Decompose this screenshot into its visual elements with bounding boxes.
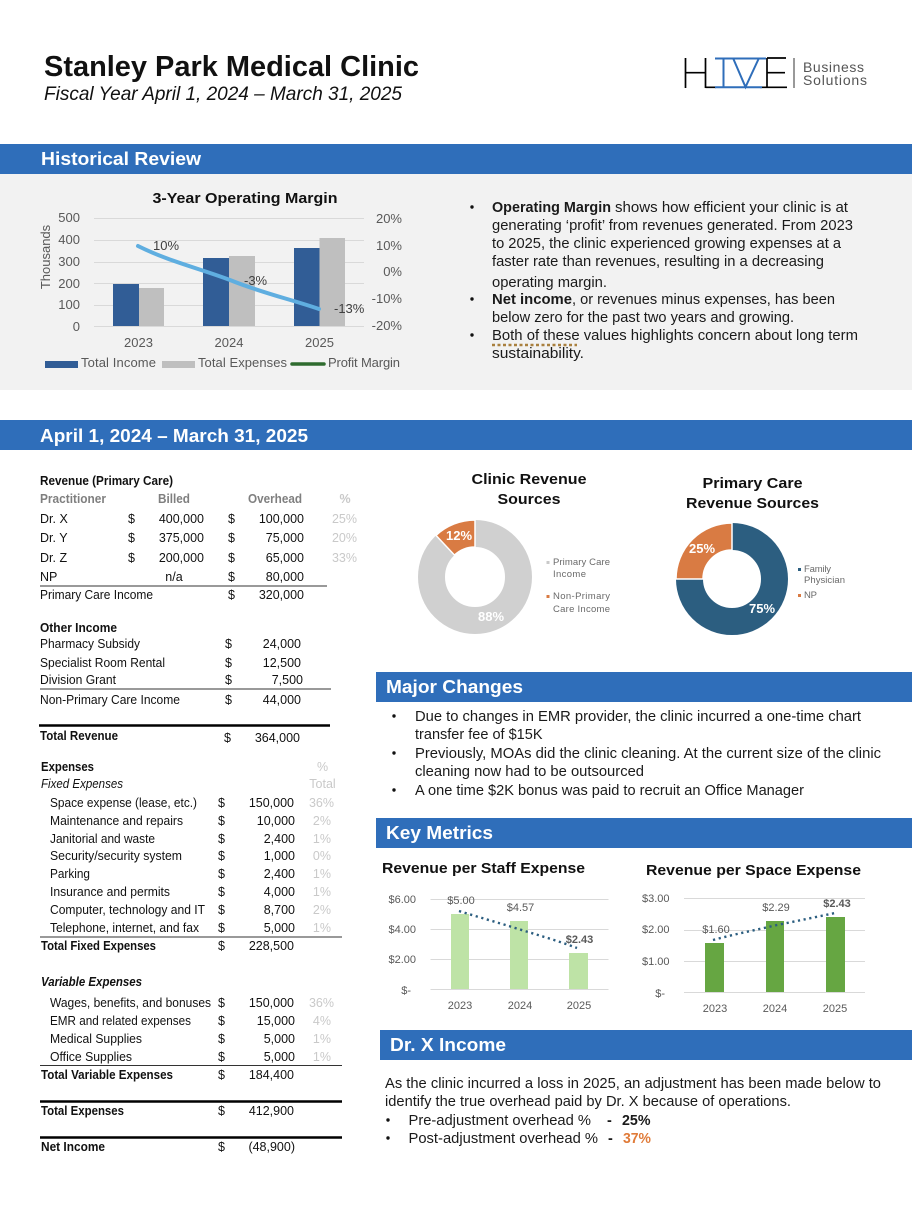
text block: major changes: Due to changes in EMR provider, the clinic incurred a one-time chart	[415, 709, 861, 725]
table: revenue: 25%	[332, 512, 357, 526]
table: expenses: 10,000	[257, 814, 295, 828]
chart: revenue per space expense: 2024	[763, 1003, 787, 1015]
text block: Dr. X income: Post-adjustment overhead %	[408, 1131, 598, 1147]
chart: revenue per staff expense: $6.00	[388, 894, 416, 906]
chart: revenue per space expense: Revenue per Space Expense	[646, 863, 861, 879]
text block: Dr. X income: As the clinic incurred a loss in 2025, an adjustment has been made below to	[385, 1076, 881, 1092]
table: revenue: n/a	[165, 570, 183, 584]
table: revenue: $	[228, 531, 235, 545]
table: expenses: 2%	[313, 814, 331, 828]
title: Stanley Park Medical Clinic	[44, 51, 419, 83]
text block: historical review notes: faster rate than revenues, resulting in a decreasing	[492, 254, 824, 270]
table: revenue: 400,000	[159, 512, 204, 526]
chart: 3-year operating margin: Profit Margin	[328, 355, 400, 370]
table: revenue: Billed	[158, 492, 190, 506]
table: revenue: 75,000	[266, 531, 304, 545]
heading bar: Historical Review: Historical Review	[41, 149, 202, 169]
table: expenses: $	[218, 1068, 225, 1082]
table: revenue: $	[225, 693, 232, 707]
chart: 3-year operating margin: 400	[58, 232, 80, 247]
table: expenses: Total	[309, 777, 336, 791]
chart: revenue per staff expense: Revenue per Staff Expense	[382, 861, 585, 877]
table: expenses: Telephone, internet, and fax	[50, 921, 200, 935]
text block: Dr. X income: Pre-adjustment overhead %	[408, 1113, 591, 1129]
table: revenue: $	[225, 637, 232, 651]
text block: historical review notes: Net income	[492, 292, 572, 308]
text block: major changes: Previously, MOAs did the clinic cleaning. At the current size of the clinic	[415, 746, 881, 762]
table: expenses: 4%	[313, 1014, 331, 1028]
chart: 3-year operating margin: Total Income	[81, 355, 156, 370]
logo: HIVE Business Solutions: Solutions	[803, 72, 867, 88]
text block: historical review notes	[470, 200, 858, 362]
chart: revenue per space expense: 2023	[703, 1003, 727, 1015]
table: expenses: $	[218, 996, 225, 1010]
table: expenses: $	[218, 939, 225, 953]
text block: major changes: A one time $2K bonus was paid to recruit an Office Manager	[415, 783, 804, 799]
table: expenses: 15,000	[257, 1014, 295, 1028]
table: revenue: $	[128, 531, 135, 545]
chart: revenue per space expense: $2.00	[642, 924, 670, 936]
chart: revenue per space expense: $2.43	[823, 898, 851, 910]
chart: primary care revenue sources donut: 25%	[689, 541, 715, 556]
chart: revenue per staff expense: 2025	[567, 1000, 591, 1012]
chart: clinic revenue sources donut	[432, 472, 610, 624]
table: expenses: 8,700	[264, 903, 295, 917]
table: expenses: 36%	[309, 996, 334, 1010]
table: expenses: $	[218, 849, 225, 863]
table: revenue: Specialist Room Rental	[40, 656, 165, 670]
table: revenue: 320,000	[259, 588, 304, 602]
chart: revenue per staff expense: 2024	[508, 1000, 532, 1012]
table: expenses: Variable Expenses	[41, 975, 142, 989]
table: revenue: $	[224, 731, 231, 745]
table: expenses: 150,000	[249, 996, 294, 1010]
chart: 3-year operating margin: 0	[73, 319, 80, 334]
text block: Dr. X income: -	[607, 1113, 612, 1129]
chart: 3-year operating margin: -3%	[244, 273, 268, 288]
table: revenue: Practitioner	[40, 492, 106, 506]
chart: revenue per space expense: $1.60	[702, 924, 730, 936]
table: revenue: Dr. Z	[40, 551, 67, 565]
chart: 3-year operating margin: Thousands	[38, 224, 53, 289]
table: revenue: 44,000	[263, 693, 301, 707]
chart: 3-year operating margin	[38, 191, 402, 370]
table: expenses: 1,000	[264, 849, 295, 863]
table: revenue: 80,000	[266, 570, 304, 584]
table: expenses: Expenses	[41, 760, 94, 774]
table: revenue: Non-Primary Care Income	[40, 693, 180, 707]
table: expenses: 2,400	[264, 867, 295, 881]
table: expenses: EMR and related expenses	[50, 1014, 191, 1028]
table: expenses: 1%	[313, 867, 331, 881]
chart: clinic revenue sources donut: Clinic Revenue	[472, 472, 586, 488]
text block: major changes: transfer fee of $15K	[415, 727, 543, 743]
table: revenue: $	[225, 656, 232, 670]
text block: Dr. X income	[385, 1076, 881, 1147]
table: revenue	[39, 474, 357, 745]
chart: 3-year operating margin: -10%	[372, 291, 402, 306]
table: expenses: Wages, benefits, and bonuses	[50, 996, 211, 1010]
chart: revenue per staff expense: 2023	[448, 1000, 472, 1012]
chart: revenue per space expense: $-	[655, 988, 665, 1000]
text block: historical review notes: to 2025, the clinic experienced growing expenses at a	[492, 236, 842, 252]
chart: revenue per staff expense: $5.00	[447, 895, 475, 907]
chart: revenue per space expense: $1.00	[642, 956, 670, 968]
table: expenses	[40, 760, 342, 1154]
table: revenue: 65,000	[266, 551, 304, 565]
table: expenses: $	[218, 832, 225, 846]
table: revenue: 20%	[332, 531, 357, 545]
table: expenses: $	[218, 921, 225, 935]
chart: primary care revenue sources donut: Physician	[804, 575, 845, 586]
chart: revenue per staff expense: $-	[401, 985, 411, 997]
chart: primary care revenue sources donut	[676, 476, 845, 622]
text block: historical review notes: shows how efficient your clinic is at	[615, 200, 848, 216]
table: expenses: $	[218, 1032, 225, 1046]
table: expenses: Total Variable Expenses	[41, 1068, 173, 1082]
heading bar: Dr. X Income: Dr. X Income	[390, 1035, 506, 1055]
text block: Dr. X income: 25%	[622, 1113, 651, 1129]
table: revenue: 200,000	[159, 551, 204, 565]
chart: 3-year operating margin: 2025	[305, 335, 334, 350]
heading bar: Dr. X Income	[380, 1030, 912, 1060]
chart: 3-year operating margin: Total Expenses	[198, 355, 288, 370]
table: expenses: Medical Supplies	[50, 1032, 142, 1046]
table: expenses: 2%	[313, 903, 331, 917]
chart: clinic revenue sources donut: Care Income	[553, 604, 610, 615]
text block: historical review notes: Both of these values highlights concern about long term	[492, 328, 858, 344]
chart: clinic revenue sources donut: Income	[553, 569, 586, 580]
table: expenses: Total Fixed Expenses	[41, 939, 156, 953]
heading bar: April 1, 2024 – March 31, 2025	[0, 420, 912, 450]
table: expenses: $	[218, 1140, 225, 1154]
table: expenses: Computer, technology and IT	[50, 903, 205, 917]
text block: Dr. X income: -	[608, 1131, 613, 1147]
chart: clinic revenue sources donut: Non-Primary	[553, 591, 610, 602]
text block: historical review notes: , or revenues minus expenses, has been	[572, 292, 835, 308]
title	[44, 51, 419, 105]
chart: 3-year operating margin: 10%	[153, 238, 179, 253]
table: revenue: 375,000	[159, 531, 204, 545]
text block: historical review notes: Operating Margin	[492, 200, 611, 216]
table: expenses: (48,900)	[248, 1140, 295, 1154]
table: revenue: $	[128, 551, 135, 565]
chart: 3-year operating margin: 10%	[376, 238, 402, 253]
text block: historical review notes: generating ‘profit’ from revenues generated. From 2023	[492, 218, 853, 234]
chart: revenue per staff expense	[382, 861, 608, 1012]
chart: revenue per staff expense: $4.00	[388, 924, 416, 936]
table: revenue: $	[228, 588, 235, 602]
text block: major changes	[392, 709, 881, 799]
chart: clinic revenue sources donut: 88%	[478, 609, 504, 624]
table: revenue: 7,500	[272, 673, 303, 687]
logo: HIVE Business Solutions	[686, 58, 867, 88]
text block: Dr. X income: identify the true overhead paid by Dr. X because of operations.	[385, 1094, 791, 1110]
table: expenses: 1%	[313, 1032, 331, 1046]
chart: revenue per space expense: 2025	[823, 1003, 847, 1015]
table: expenses: 150,000	[249, 796, 294, 810]
table: revenue: NP	[40, 570, 57, 584]
chart: 3-year operating margin: -13%	[334, 301, 365, 316]
table: revenue: $	[225, 673, 232, 687]
table: expenses: Total Expenses	[41, 1104, 124, 1118]
table: expenses: 4,000	[264, 885, 295, 899]
chart: 3-year operating margin: 2024	[215, 335, 243, 350]
table: expenses: 5,000	[264, 1032, 295, 1046]
table: expenses: Net Income	[41, 1140, 105, 1154]
table: expenses: $	[218, 1104, 225, 1118]
heading bar: Historical Review	[0, 144, 912, 174]
table: expenses: 5,000	[264, 1050, 295, 1064]
chart: revenue per space expense: $3.00	[642, 893, 670, 905]
chart: clinic revenue sources donut: Primary Care	[553, 557, 610, 568]
text block: major changes: cleaning now had to be outsourced	[415, 764, 644, 780]
table: expenses: Fixed Expenses	[41, 777, 123, 791]
table: revenue: %	[339, 492, 351, 506]
chart: 3-year operating margin: 0%	[383, 264, 402, 279]
table: revenue: Other Income	[40, 621, 117, 635]
table: revenue: 24,000	[263, 637, 301, 651]
table: revenue: Overhead	[248, 492, 302, 506]
table: expenses: $	[218, 1050, 225, 1064]
table: expenses: $	[218, 814, 225, 828]
table: expenses: $	[218, 885, 225, 899]
table: revenue: Dr. X	[40, 512, 68, 526]
heading bar: Key Metrics: Key Metrics	[386, 823, 493, 843]
table: expenses: $	[218, 867, 225, 881]
table: revenue: $	[128, 512, 135, 526]
table: revenue: $	[228, 551, 235, 565]
table: revenue: Dr. Y	[40, 531, 68, 545]
table: expenses: %	[317, 760, 328, 774]
table: expenses: 1%	[313, 832, 331, 846]
table: revenue: 100,000	[259, 512, 304, 526]
chart: primary care revenue sources donut: Family	[804, 564, 831, 575]
heading bar: Key Metrics	[376, 818, 912, 848]
table: revenue: Division Grant	[40, 673, 117, 687]
text block: historical review notes: below zero for the past two years and growing.	[492, 310, 794, 326]
table: expenses: Parking	[50, 867, 90, 881]
chart: 3-year operating margin: 300	[58, 254, 80, 269]
chart: 3-year operating margin: 20%	[376, 211, 402, 226]
chart: clinic revenue sources donut: 12%	[446, 528, 472, 543]
table: expenses: Office Supplies	[50, 1050, 132, 1064]
table: expenses: 1%	[313, 1050, 331, 1064]
panel: historical review	[0, 174, 912, 390]
table: expenses: $	[218, 903, 225, 917]
text block: historical review notes: sustainability.	[492, 346, 584, 362]
title: Fiscal Year April 1, 2024 – March 31, 2025	[44, 84, 402, 105]
chart: 3-year operating margin: 100	[58, 297, 80, 312]
table: expenses: Maintenance and repairs	[50, 814, 183, 828]
table: expenses: Janitorial and waste	[50, 832, 155, 846]
table: revenue: $	[228, 570, 235, 584]
table: expenses: $	[218, 796, 225, 810]
table: expenses: 228,500	[249, 939, 294, 953]
chart: revenue per space expense	[642, 863, 865, 1015]
chart: 3-year operating margin: 500	[58, 210, 80, 225]
heading bar: Major Changes: Major Changes	[386, 677, 523, 697]
table: revenue: 364,000	[255, 731, 300, 745]
table: revenue: Revenue (Primary Care)	[40, 474, 173, 488]
table: expenses: 2,400	[264, 832, 295, 846]
chart: primary care revenue sources donut: NP	[804, 590, 817, 601]
logo: HIVE Business Solutions: Business	[803, 59, 864, 75]
chart: revenue per staff expense: $4.57	[507, 902, 534, 914]
text block: Dr. X income: 37%	[623, 1131, 651, 1147]
table: revenue: 33%	[332, 551, 357, 565]
chart: 3-year operating margin: 2023	[124, 335, 153, 350]
chart: revenue per space expense: $2.29	[762, 902, 790, 914]
table: expenses: Space expense (lease, etc.)	[50, 796, 197, 810]
table: revenue: Pharmacy Subsidy	[40, 637, 141, 651]
table: expenses: Security/security system	[50, 849, 182, 863]
table: expenses: 1%	[313, 921, 331, 935]
chart: clinic revenue sources donut: Sources	[498, 492, 560, 508]
chart: 3-year operating margin: 200	[58, 276, 80, 291]
chart: revenue per staff expense: $2.00	[388, 954, 416, 966]
table: expenses: 5,000	[264, 921, 295, 935]
table: revenue: $	[228, 512, 235, 526]
table: expenses: 184,400	[249, 1068, 294, 1082]
table: expenses: 1%	[313, 885, 331, 899]
table: revenue: Total Revenue	[40, 729, 118, 743]
table: expenses: 36%	[309, 796, 334, 810]
chart: primary care revenue sources donut: Primary Care	[702, 476, 802, 492]
heading bar: Major Changes	[376, 672, 912, 702]
table: expenses: Insurance and permits	[50, 885, 170, 899]
table: expenses: 0%	[313, 849, 331, 863]
chart: 3-year operating margin: -20%	[372, 318, 402, 333]
heading bar: April 1, 2024 – March 31, 2025: April 1, 2024 – March 31, 2025	[40, 426, 308, 446]
chart: 3-year operating margin: 3-Year Operating Margin	[152, 191, 338, 207]
chart: primary care revenue sources donut: 75%	[749, 601, 775, 616]
text block: historical review notes: operating margin.	[492, 275, 607, 291]
table: revenue: 12,500	[263, 656, 301, 670]
table: expenses: 412,900	[249, 1104, 294, 1118]
table: expenses: $	[218, 1014, 225, 1028]
chart: primary care revenue sources donut: Revenue Sources	[686, 496, 819, 512]
table: revenue: Primary Care Income	[40, 588, 153, 602]
chart: revenue per staff expense: $2.43	[566, 934, 593, 946]
